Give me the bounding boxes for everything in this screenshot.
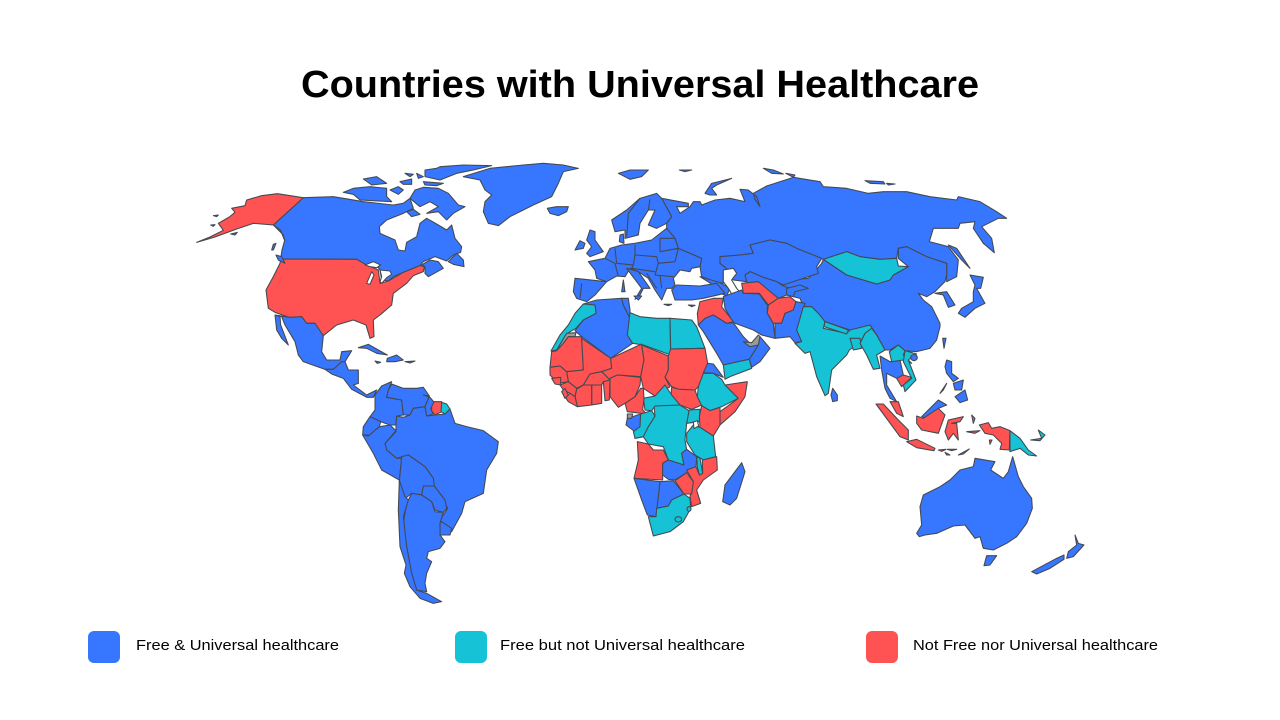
Iceland [547, 207, 568, 216]
Nigeria [610, 375, 641, 407]
title: Countries with Universal Healthcare [301, 64, 979, 106]
Libya [627, 313, 671, 355]
Java [907, 439, 935, 451]
UAE [743, 335, 760, 347]
Uzbekistan [745, 272, 790, 298]
Namibia [634, 478, 660, 517]
Gabon [626, 414, 641, 432]
legend item: not free nor universal: Not Free nor Universal healthcare [913, 637, 1158, 654]
Great Lakes [365, 262, 392, 284]
Mozambique [687, 457, 717, 507]
region: Europe and Northern Asia [573, 168, 1007, 352]
Niger [602, 344, 644, 380]
country: Canada [273, 197, 462, 281]
Vietnam [903, 351, 917, 392]
Bangladesh [850, 338, 862, 350]
Chad [641, 345, 670, 396]
Yemen [723, 359, 752, 379]
Canadian islands [211, 165, 492, 277]
region: Central and South America [275, 315, 498, 603]
Cambodia [897, 375, 912, 387]
Burkina Faso [583, 372, 610, 385]
United Kingdom [587, 230, 603, 257]
Turkmenistan [742, 282, 778, 305]
region: Africa [550, 298, 747, 536]
Indonesian Borneo [917, 408, 945, 433]
legend [88, 631, 1158, 663]
world map [197, 163, 1084, 603]
Brazil [385, 407, 498, 532]
Denmark [619, 234, 624, 243]
Lake Victoria [693, 421, 699, 429]
Botswana [657, 481, 684, 508]
region: Oceania [917, 415, 1084, 574]
Peru [363, 425, 402, 480]
Sudan [665, 348, 708, 390]
Ghana and Togo [592, 385, 602, 405]
Scandinavia [612, 193, 672, 238]
Caribbean islands [358, 344, 415, 363]
New Zealand North Island [1067, 535, 1084, 558]
Baja California [275, 315, 288, 345]
Caspian Sea [723, 268, 745, 298]
Mexico [275, 315, 352, 369]
Suriname [432, 402, 442, 415]
Ireland [575, 241, 585, 250]
Greenland [463, 163, 578, 226]
Iran [723, 290, 775, 338]
Myanmar [860, 328, 885, 369]
Finland border [648, 199, 650, 210]
Ethiopia [697, 373, 738, 411]
Indonesian islands [938, 415, 992, 455]
Guinea [560, 382, 577, 397]
Hainan [911, 355, 917, 361]
Tasmania [984, 556, 997, 566]
Kenya [699, 406, 720, 436]
Australia [917, 457, 1032, 550]
Zambia [663, 449, 697, 480]
Western Sahara [557, 333, 576, 351]
Afghanistan [767, 297, 796, 323]
Madagascar [723, 463, 745, 505]
Ecuador [363, 417, 381, 435]
legend item: free and universal: Free & Universal healthcare [136, 637, 339, 654]
Cameroon [625, 388, 647, 414]
Nepal [824, 322, 848, 334]
French Guiana [441, 402, 450, 414]
Taiwan [943, 338, 946, 348]
Papua New Guinea [1010, 431, 1037, 456]
Sakhalin [948, 245, 970, 268]
Chile [398, 480, 442, 603]
Mongolia [823, 252, 908, 284]
Central African Republic [643, 385, 680, 411]
Malawi [697, 457, 703, 475]
Angola [634, 442, 668, 480]
Eritrea [703, 363, 723, 377]
Zimbabwe [675, 473, 693, 494]
Turkey [672, 283, 725, 300]
India [795, 307, 877, 396]
Paraguay [422, 486, 447, 512]
Central America [325, 362, 377, 397]
Russia [662, 177, 1007, 283]
Equatorial Guinea [627, 414, 633, 418]
Mali [567, 338, 612, 388]
Argentina [403, 493, 445, 592]
legend item: free but not universal [455, 631, 745, 663]
Morocco [551, 304, 596, 351]
Mediterranean islands [622, 280, 695, 307]
South Africa [648, 494, 691, 536]
legend item: free but not universal: Free but not Universal healthcare [500, 637, 745, 654]
Colombia [370, 382, 403, 425]
Malaysian Borneo [922, 400, 947, 418]
region: North America [197, 163, 578, 363]
Oman [749, 337, 770, 367]
Lesotho [675, 517, 682, 522]
Saudi Arabia [698, 315, 758, 365]
Benin [603, 379, 610, 401]
Uganda [687, 409, 700, 423]
Portugal border [580, 283, 582, 298]
Sulawesi [945, 417, 963, 440]
Thailand and Malaysia [880, 356, 903, 402]
Spain and Portugal [573, 278, 607, 302]
Laos [889, 345, 912, 363]
Mauritania [550, 337, 583, 372]
Sri Lanka [831, 388, 837, 402]
Sumatra [876, 404, 908, 440]
country: Alaska [197, 194, 303, 242]
Tanzania [687, 425, 716, 460]
DR Congo [635, 404, 689, 465]
Scandinavian borders [627, 198, 640, 237]
Caucasus [700, 277, 730, 296]
Korea [935, 292, 955, 307]
Ivory Coast [575, 385, 592, 407]
South Sudan [671, 387, 702, 409]
Mainland Europe [588, 228, 702, 300]
Philippines [940, 360, 968, 403]
Venezuela [387, 384, 429, 415]
Svalbard [618, 170, 648, 179]
Malay Peninsula red section [890, 402, 903, 417]
Arctic islands [679, 168, 895, 195]
Western New Guinea [979, 423, 1010, 450]
Republic of Congo [633, 411, 655, 438]
Algeria [575, 298, 633, 358]
Italy [627, 268, 650, 299]
China [783, 247, 947, 352]
Eswatini [687, 507, 691, 511]
Bolivia [399, 455, 434, 500]
New Zealand South Island [1032, 555, 1064, 574]
legend item: free and universal [88, 631, 339, 663]
Pakistan [775, 302, 805, 343]
Kazakhstan [720, 240, 822, 285]
country: United States [266, 259, 424, 338]
Japan [958, 275, 985, 317]
Syria, Iraq and Jordan [697, 298, 733, 325]
region: Middle East and South Asia [697, 282, 968, 451]
Guinea-Bissau [552, 377, 561, 385]
Uruguay [440, 521, 452, 535]
Egypt [670, 318, 705, 349]
Tunisia [622, 298, 630, 318]
Guyana [423, 395, 435, 416]
legend item: not free nor universal [866, 631, 1158, 663]
Sierra Leone [562, 388, 568, 398]
Senegal [550, 366, 568, 383]
Liberia [565, 393, 577, 407]
European borders [605, 238, 678, 288]
New Britain [1031, 430, 1045, 441]
Somalia [720, 382, 747, 425]
Kyrgyzstan and Tajikistan [787, 285, 808, 297]
